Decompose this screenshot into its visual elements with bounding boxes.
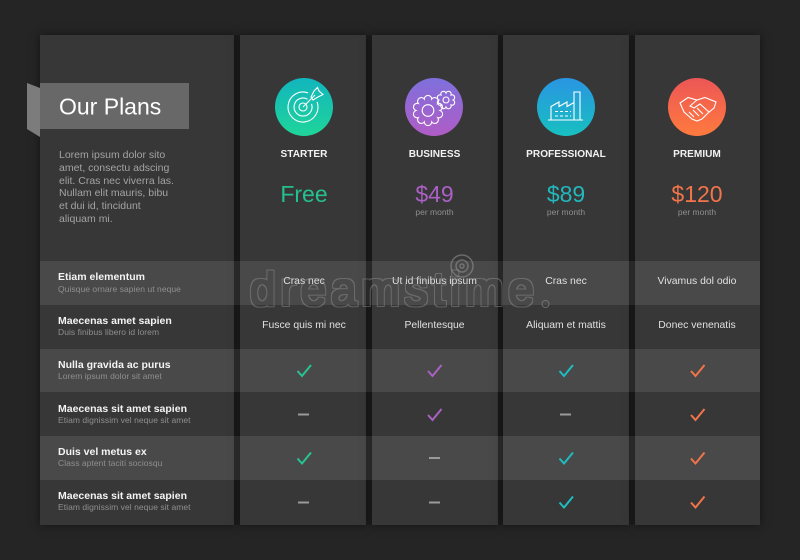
row 3 label: Nulla gravida ac purus [58,359,171,371]
price: 120: $120 [671,181,723,207]
row 3 sublabel: Lorem ipsum dolor sit amet [58,371,162,381]
value: row 2 starter: Fusce quis mi nec [262,320,346,331]
row 2 label: Maecenas amet sapien [58,315,172,327]
intro text: amet, consectu adscing [59,162,169,174]
period: business: per month [415,207,454,217]
price: 49: $49 [415,181,454,207]
intro text: Lorem ipsum dolor sito [59,149,165,161]
intro text: Nullam elit mauris, bibu [59,187,168,199]
value: row 1 professional: Cras nec [545,276,587,287]
value: row 2 professional: Aliquam et mattis [526,320,606,331]
row 1 label: Etiam elementum [58,271,145,283]
plan name: professional: PROFESSIONAL [526,149,606,160]
period: professional: per month [547,207,585,217]
row 6 sublabel: Etiam dignissim vel neque sit amet [58,502,191,512]
icon: handshake [668,78,726,136]
icon: factory [537,78,595,136]
price: 89: $89 [547,181,585,207]
panel: starter column [240,35,366,525]
panel: premium column [635,35,760,525]
value: row 2 business: Pellentesque [404,320,465,331]
row band 3 [40,349,760,392]
row 4 label: Maecenas sit amet sapien [58,403,187,415]
icons [275,78,726,136]
value: row 1 starter: Cras nec [283,276,325,287]
ribbon: Our Plans heading [27,83,189,137]
ribbon: Our Plans heading: Our Plans [59,94,161,120]
intro text: elit. Cras nec viverra las. [59,175,174,187]
row 5 sublabel: Class aptent taciti sociosqu [58,458,162,468]
row band 1 [40,261,760,305]
row band 5 [40,436,760,480]
plan name: premium: PREMIUM [673,149,721,160]
row 6 label: Maecenas sit amet sapien [58,490,187,502]
period: premium: per month [678,207,716,217]
value: row 1 premium: Vivamus dol odio [658,276,736,287]
panel: label column [40,35,234,525]
intro text [59,149,174,225]
row 4 sublabel: Etiam dignissim vel neque sit amet [58,415,191,425]
panel: professional column [503,35,629,525]
plan name: starter: STARTER [281,149,327,160]
row 5 label: Duis vel metus ex [58,446,147,458]
value: row 2 premium: Donec venenatis [658,320,736,331]
plan name: business: BUSINESS [409,149,460,160]
panel: business column [372,35,498,525]
feature checks and dashes [296,364,706,509]
price: free: Free [280,181,328,207]
intro text: et dui id, tincidunt [59,200,141,212]
watermark: dreamstime [250,263,534,315]
icon: gears [405,78,463,136]
icon: target [275,78,333,136]
intro text: aliquam mi. [59,213,113,225]
value: row 1 business: Ut id finibus ipsum [392,276,477,287]
row 2 sublabel: Duis finibus libero id lorem [58,327,159,337]
row 1 sublabel: Quisque ornare sapien ut neque [58,284,181,294]
